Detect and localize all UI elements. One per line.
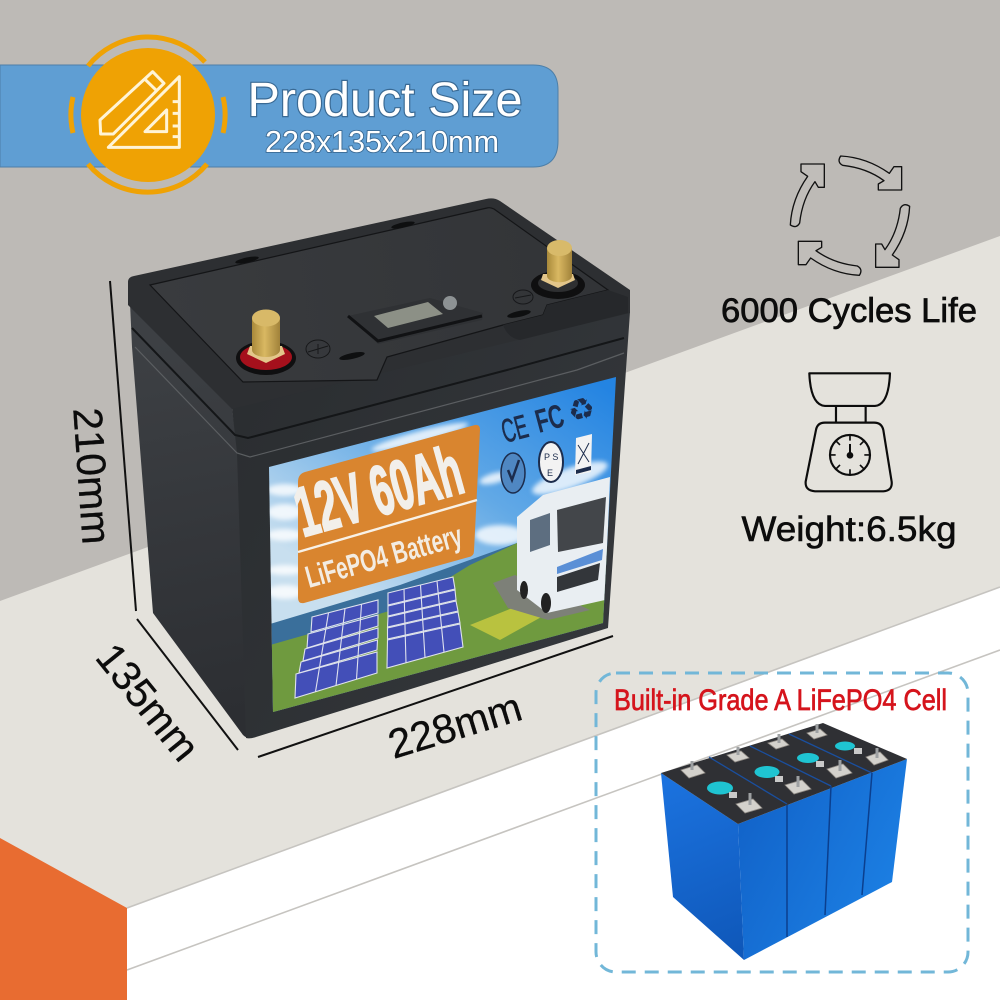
negative terminal — [531, 240, 585, 299]
LiFePO4 cell pack — [661, 723, 907, 960]
landscape — [270, 520, 610, 720]
banner title: Product Size — [248, 73, 522, 127]
recycle mark: ♻ — [564, 390, 599, 431]
CE mark: CE — [497, 407, 532, 450]
orange capacity panel — [286, 425, 480, 603]
inset panel: built-in cell — [596, 673, 968, 972]
certification marks — [500, 398, 592, 494]
battery front face — [232, 312, 630, 738]
cycle life label: 6000 Cycles Life — [721, 292, 977, 330]
battery lid — [128, 198, 630, 409]
WEEE mark — [575, 434, 592, 475]
PSE mark: E — [547, 468, 553, 478]
PSE mark: P S — [544, 452, 558, 462]
weight label: Weight:6.5kg — [742, 509, 956, 549]
battery side face — [130, 303, 250, 738]
cell terminals — [681, 724, 888, 813]
solar panel array right — [387, 577, 463, 668]
banner dimensions: 228x135x210mm — [265, 125, 499, 159]
positive terminal — [236, 310, 296, 375]
battery — [128, 198, 630, 738]
polarity marks — [306, 290, 533, 358]
icon: ruler and pencil badge — [71, 37, 225, 192]
dimension label: 210mm: 210mm — [64, 406, 120, 546]
motorhome — [517, 477, 610, 613]
sky and clouds — [269, 377, 616, 712]
solar panel array left — [295, 600, 378, 698]
header banner: Product Size — [0, 37, 558, 192]
LCD display — [348, 296, 483, 344]
lid slots — [235, 220, 531, 362]
FC mark: FC — [531, 397, 568, 440]
inset heading: Built-in Grade A LiFePO4 Cell — [614, 684, 947, 717]
banner pill — [0, 65, 558, 167]
cell plugs — [729, 748, 862, 798]
icon: cycle arrows — [790, 156, 910, 275]
chemistry text: LiFePO4 Battery — [302, 518, 466, 595]
PSE mark — [539, 442, 563, 482]
cell vents — [707, 742, 855, 794]
dimension lines — [110, 281, 613, 757]
dimension label: 228mm: 228mm — [383, 684, 527, 768]
capacity text: 12V 60Ah — [286, 431, 471, 551]
dimension label: 135mm: 135mm — [87, 635, 209, 770]
dashed frame — [596, 673, 968, 972]
icon: weighing scale — [806, 373, 892, 491]
battery label sticker — [269, 377, 616, 712]
RoHS mark — [501, 453, 525, 493]
